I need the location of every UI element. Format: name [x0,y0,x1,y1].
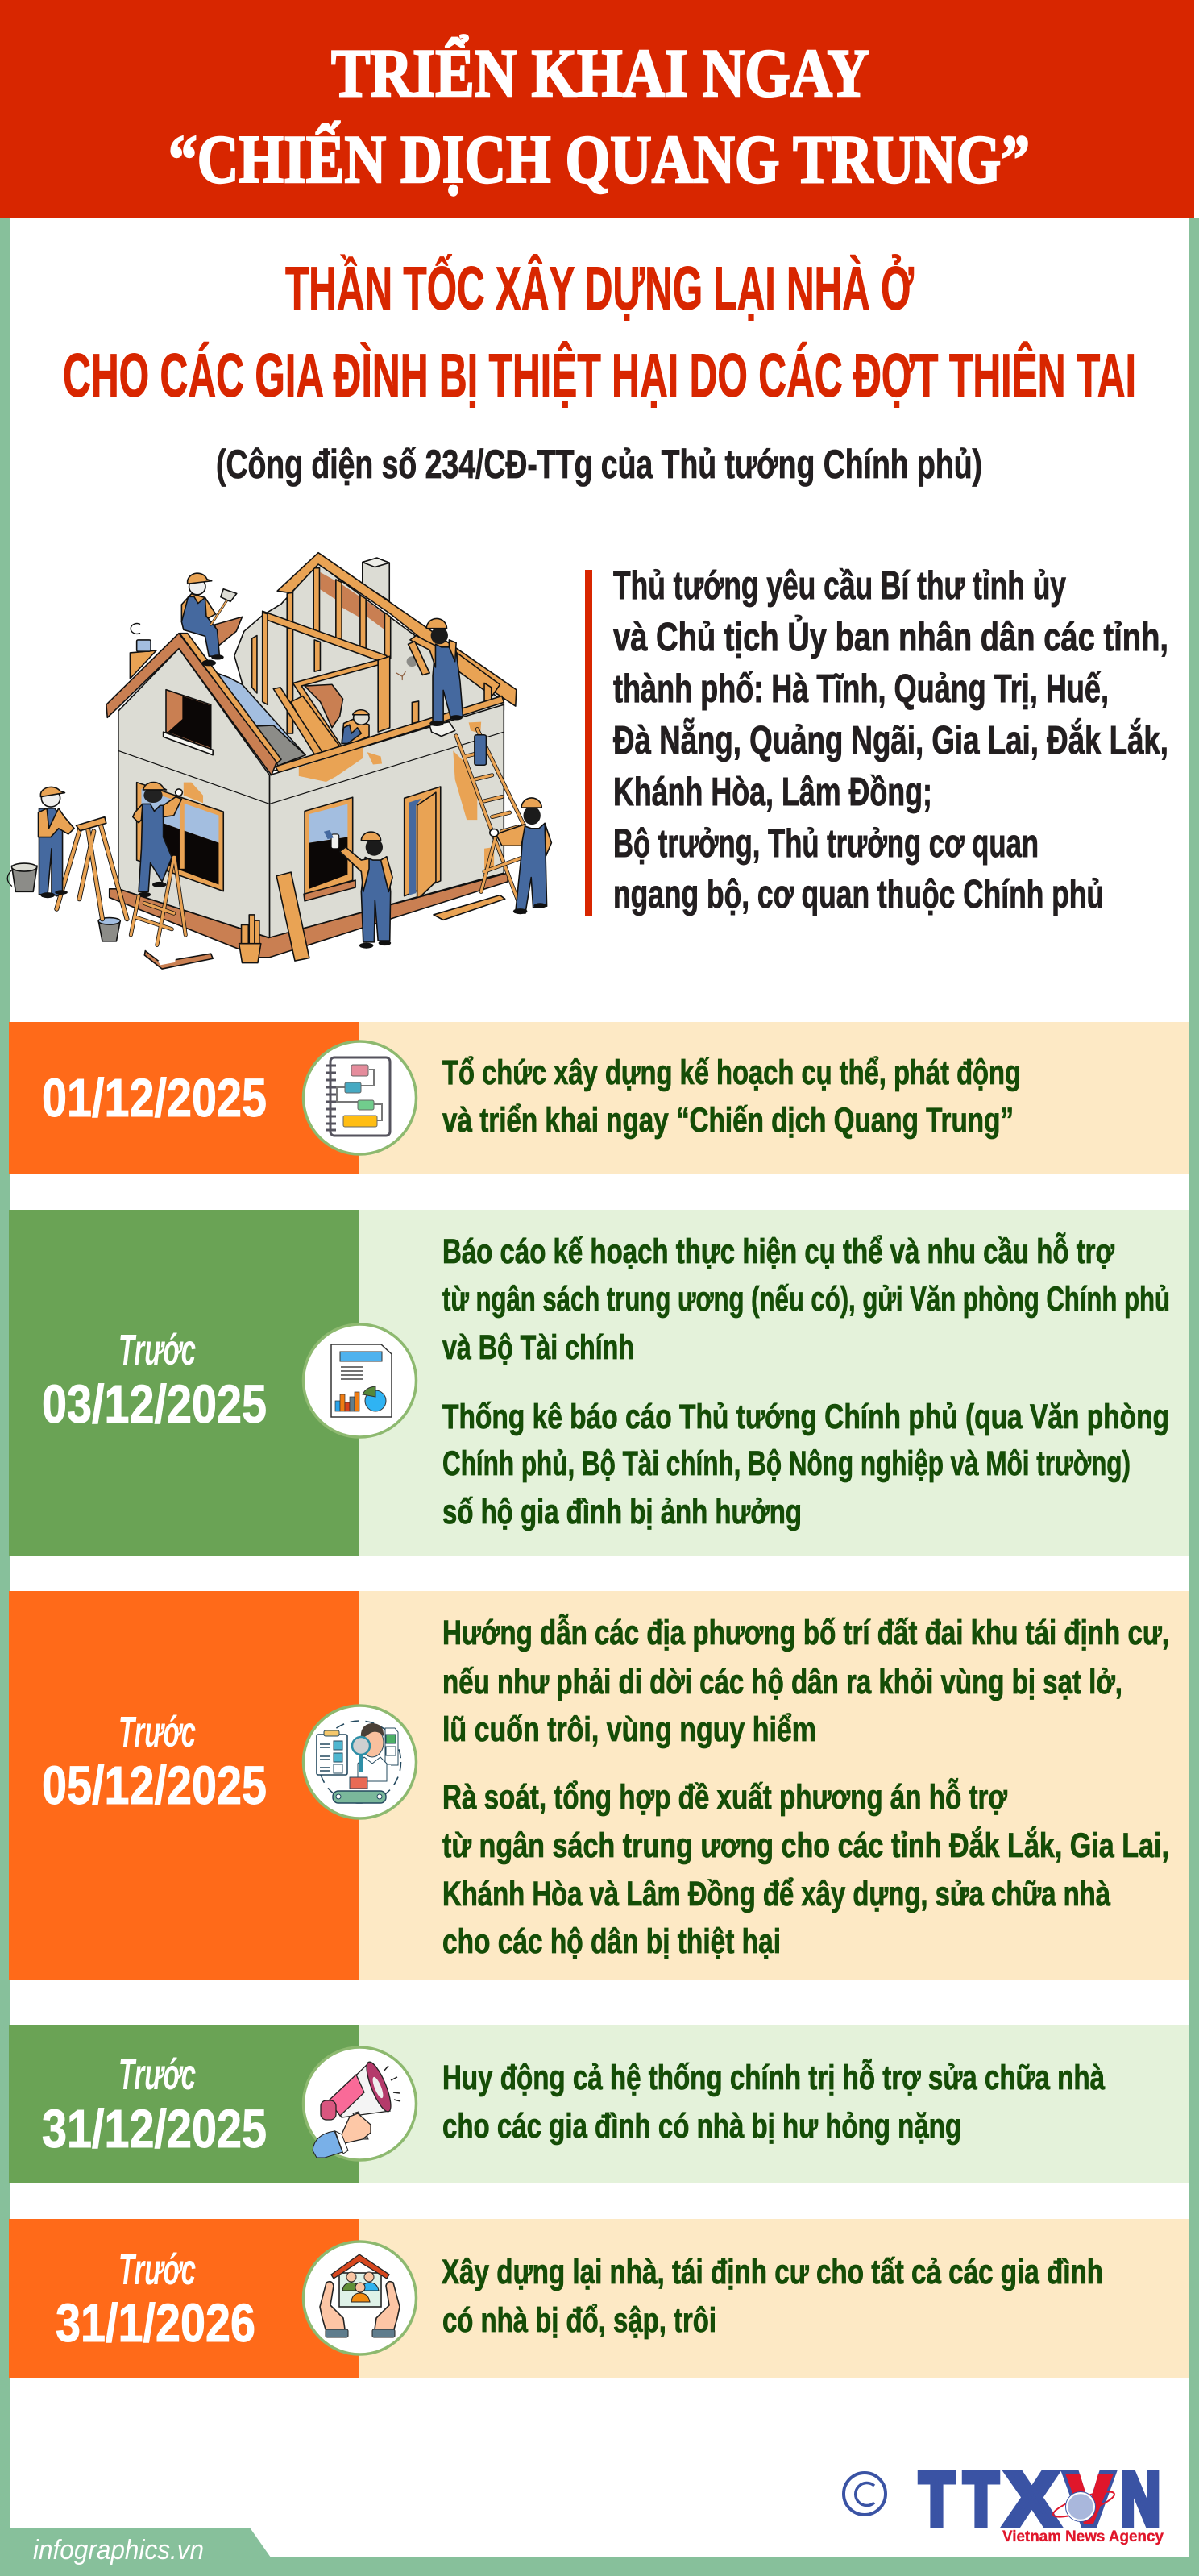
bucket left [7,863,37,891]
right ladder [456,729,523,904]
logo: TTXVN Vietnam News Agency: N [1121,2457,1160,2541]
date label: 31/1/2026 [56,2293,255,2354]
worker at window on ladder [131,783,185,945]
door [405,787,441,900]
description: Tổ chức xây dựng kế hoạch cụ thể, phát động [442,1053,1021,1092]
date label: Trước [118,1326,196,1374]
description [442,1232,1170,1531]
description [442,2058,1106,2146]
worker sitting on the roof [181,573,237,666]
date label [56,2246,255,2354]
date label: Trước [118,2050,196,2099]
date label: 03/12/2025 [42,1374,267,1435]
worker on the right with ladder [490,798,551,914]
intro text [613,564,1168,916]
description [442,2253,1103,2340]
date label [42,1708,267,1816]
row: trước 05/12/2025 [9,1591,1189,1980]
icon: planning notebook [303,1041,416,1154]
description: số hộ gia đình bị ảnh hưởng [442,1493,802,1531]
icon: report document [303,1324,416,1437]
description: lũ cuốn trôi, vùng nguy hiểm [442,1710,816,1749]
row: trước 31/1/2026 [9,2219,1189,2378]
wood pile and bucket [239,915,261,963]
bullet bar [585,570,592,916]
logo: TTXVN Vietnam News Agency: T [964,2457,998,2541]
logo: TTXVN Vietnam News Agency: T [919,2457,954,2541]
description: cho các gia đình có nhà bị hư hỏng nặng [442,2107,961,2146]
logo: TTXVN Vietnam News Agency: Vietnam News Agency [1002,2528,1164,2545]
date: 01/12/2025 [42,1068,267,1128]
description: và Bộ Tài chính [442,1328,634,1367]
worker behind frame [342,710,369,743]
title: TRIỂN KHAI NGAY [331,35,869,111]
description: Rà soát, tổng hợp đề xuất phương án hỗ trợ [442,1777,1007,1817]
logo: TTXVN Vietnam News Agency: V [1064,2457,1114,2541]
description: và triển khai ngay “Chiến dịch Quang Trung” [442,1101,1014,1140]
date label: Trước [118,1708,196,1756]
header banner [0,0,1194,218]
website label: infographics.vn [33,2535,204,2566]
illustration: workers repairing a house [7,553,551,969]
worker on upper right [409,618,463,726]
icon: hands protecting house [303,2242,416,2354]
date label: Trước [118,2246,196,2294]
upper window [164,690,213,755]
stepladder left [56,817,127,919]
row: trước 31/12/2025 [9,2025,1189,2183]
bucket centre [98,918,120,941]
date label: 31/12/2025 [42,2099,267,2159]
icon: megaphone [303,2047,416,2160]
row: trước 03/12/2025 [9,1210,1189,1556]
right window [304,797,355,901]
title [168,35,1030,197]
intro text: Khánh Hòa, Lâm Đồng; [613,771,932,814]
worker painting right window [324,830,392,949]
date label [42,1326,267,1435]
date label: 05/12/2025 [42,1755,267,1816]
footer tab [0,2528,271,2576]
description: cho các hộ dân bị thiệt hại [442,1922,781,1961]
description: có nhà bị đổ, sập, trôi [442,2301,716,2340]
intro text: Bộ trưởng, Thủ trưởng cơ quan [613,822,1039,866]
subtitle [63,254,1136,410]
row: 01/12/2025 [9,1022,1189,1174]
logo: TTXVN Vietnam News Agency [919,2457,1164,2545]
title: “CHIẾN DỊCH QUANG TRUNG” [168,121,1030,197]
worker left with ladder [39,787,74,898]
description [442,1613,1169,1961]
icon: inspection and review [303,1706,416,1818]
logo: TTXVN Vietnam News Agency: X [1006,2457,1058,2541]
lower left window [137,783,223,891]
date label [42,2050,267,2159]
copyright symbol [844,2473,886,2515]
description [442,1053,1021,1140]
